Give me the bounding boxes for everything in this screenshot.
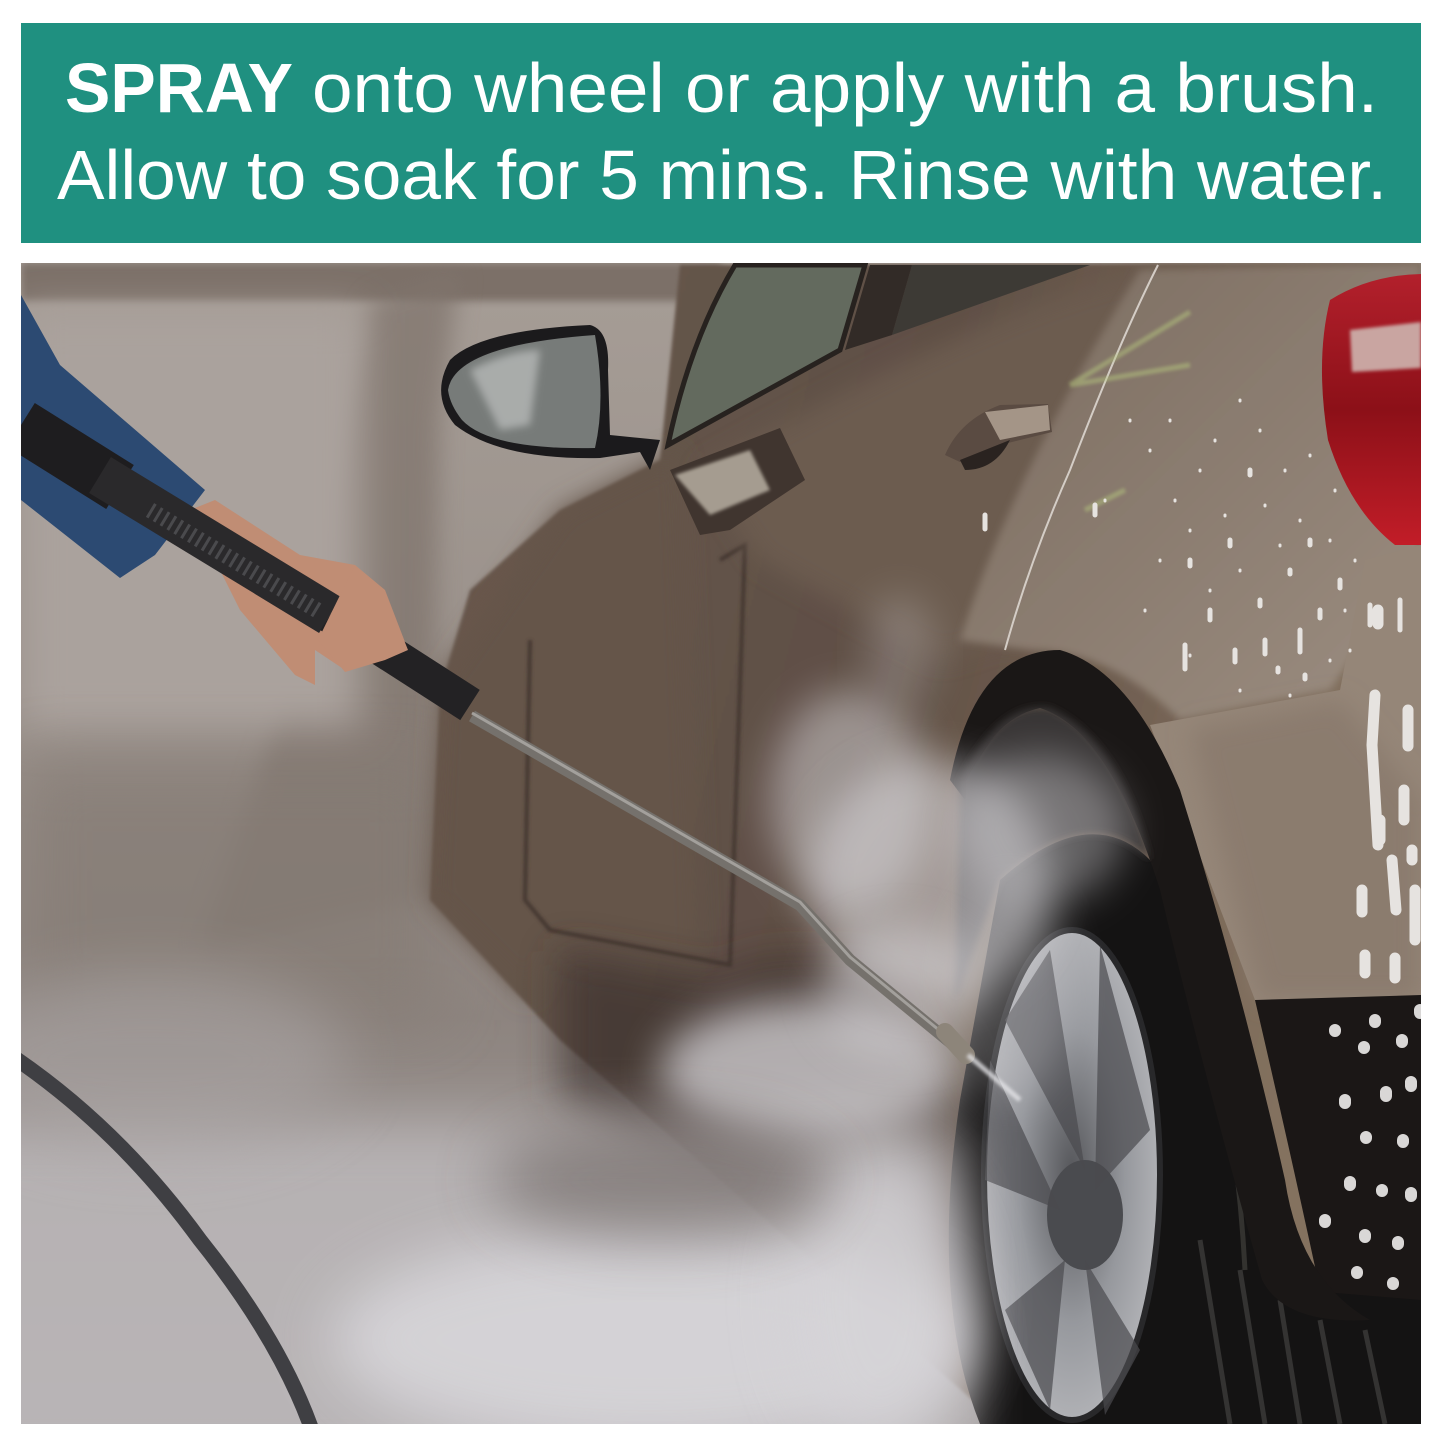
foam speckles on car xyxy=(985,400,1415,978)
spray handle xyxy=(21,425,470,705)
front door handle area xyxy=(670,428,805,535)
garage background xyxy=(21,263,1421,1424)
hand xyxy=(190,500,408,685)
body crease line xyxy=(1005,265,1158,650)
spray wand xyxy=(472,713,966,1055)
banner xyxy=(21,23,1421,243)
blue sleeve xyxy=(21,295,205,578)
water hose xyxy=(15,1058,312,1430)
banner heading line 1: remainder: onto wheel or apply with a brush. xyxy=(312,49,1378,127)
side windows xyxy=(668,265,1090,445)
wheel arch xyxy=(950,650,1370,1320)
car body side xyxy=(430,263,1421,1424)
steam cloud xyxy=(0,595,1125,1445)
banner heading line 1: bold word: SPRAY xyxy=(65,49,293,127)
fingers over handle xyxy=(318,566,408,672)
side mirror xyxy=(441,325,660,470)
tire xyxy=(949,834,1421,1424)
rear door handle xyxy=(945,404,1052,470)
banner heading line 2: Allow to soak for 5 mins. Rinse with water. xyxy=(57,136,1387,214)
bumper foam speckles xyxy=(1325,1010,1420,1284)
tail light xyxy=(1322,274,1421,545)
alloy wheel rim xyxy=(984,930,1160,1420)
rear lower bumper xyxy=(1255,995,1421,1315)
water jet xyxy=(968,1055,1020,1100)
